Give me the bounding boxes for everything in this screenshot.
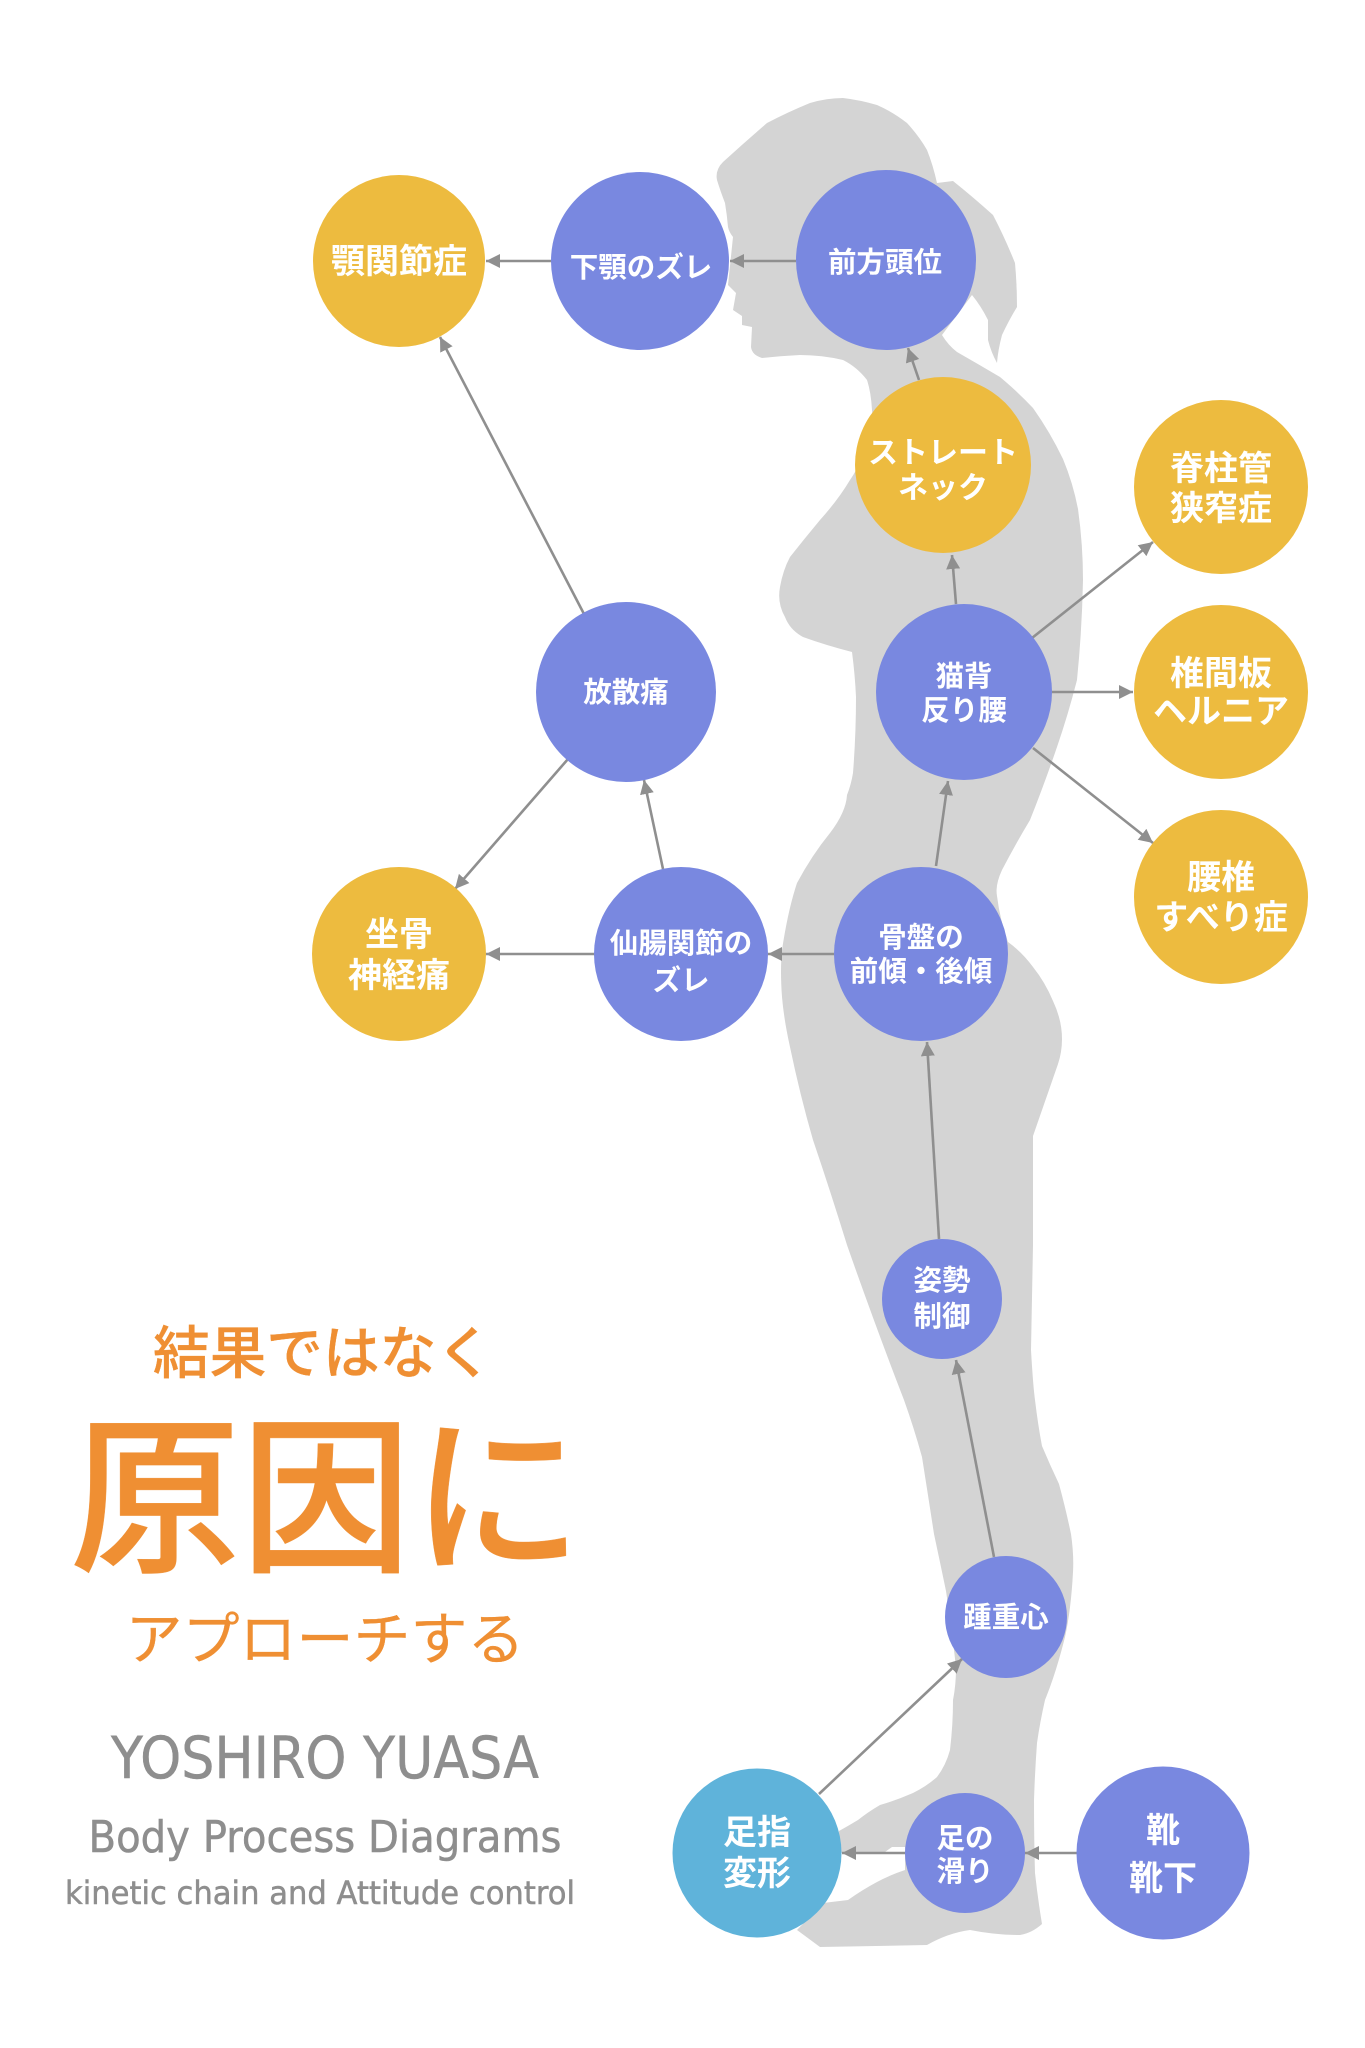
node: 仙腸関節のズレ: 仙腸関節の bbox=[610, 928, 752, 960]
heading: アプローチする: アプローチする bbox=[126, 1608, 524, 1672]
node: 顎関節症 bbox=[313, 175, 485, 347]
node: 前方頭位: 前方頭位 bbox=[828, 247, 942, 279]
node: 脊柱管狭窄症: 脊柱管 bbox=[1170, 450, 1272, 488]
node: 放散痛 bbox=[536, 602, 716, 782]
author name: YOSHIRO YUASA bbox=[110, 1724, 539, 1792]
node: 靴靴下: 靴 bbox=[1146, 1812, 1180, 1850]
node: ストレートネック: ストレート bbox=[868, 437, 1018, 470]
node: 顎関節症: 顎関節症 bbox=[331, 243, 467, 281]
arrows: causal links between nodes bbox=[440, 261, 1153, 1853]
node: 姿勢制御 bbox=[882, 1239, 1002, 1359]
node: 仙腸関節のズレ bbox=[594, 867, 768, 1041]
node: 坐骨神経痛: 坐骨 bbox=[365, 916, 433, 954]
node: 足指変形 bbox=[672, 1768, 842, 1938]
node: 脊柱管狭窄症 bbox=[1134, 400, 1308, 574]
node: ストレートネック: ネック bbox=[898, 472, 988, 505]
node: 坐骨神経痛: 神経痛 bbox=[348, 957, 450, 995]
node: 足の滑り: 滑り bbox=[936, 1856, 994, 1888]
node: 放散痛: 放散痛 bbox=[583, 677, 669, 709]
node: 猫背反り腰 bbox=[876, 604, 1052, 780]
node: 下顎のズレ bbox=[551, 172, 729, 350]
node: 足指変形: 足指 bbox=[723, 1814, 791, 1852]
node: 足指変形: 変形 bbox=[723, 1855, 791, 1893]
node: 靴靴下: 靴下 bbox=[1129, 1860, 1197, 1898]
node: 椎間板ヘルニア bbox=[1134, 605, 1308, 779]
node: 踵重心: 踵重心 bbox=[963, 1602, 1049, 1634]
node: 猫背反り腰: 反り腰 bbox=[921, 695, 1007, 727]
node: 腰椎すべり症: すべり症 bbox=[1154, 899, 1288, 937]
node: 骨盤の前傾・後傾 bbox=[834, 867, 1008, 1041]
heading: 原因に: 原因に bbox=[70, 1405, 582, 1596]
node: 脊柱管狭窄症: 狭窄症 bbox=[1170, 490, 1272, 528]
subtitle: Body Process Diagrams bbox=[88, 1812, 562, 1863]
node: ストレートネック bbox=[855, 377, 1031, 553]
node: 足の滑り: 足の bbox=[936, 1823, 994, 1855]
node: 腰椎すべり症: 腰椎 bbox=[1187, 859, 1255, 897]
node: 骨盤の前傾・後傾: 骨盤の bbox=[878, 922, 964, 954]
node: 足の滑り bbox=[905, 1793, 1025, 1913]
silhouette: standing woman in profile bbox=[717, 98, 1083, 1947]
node: 椎間板ヘルニア: ヘルニア bbox=[1153, 693, 1289, 731]
node: 猫背反り腰: 猫背 bbox=[935, 661, 993, 693]
node: 椎間板ヘルニア: 椎間板 bbox=[1170, 655, 1272, 693]
node: 坐骨神経痛 bbox=[312, 867, 486, 1041]
node: 姿勢制御: 制御 bbox=[913, 1301, 971, 1333]
node: 姿勢制御: 姿勢 bbox=[913, 1265, 971, 1297]
node: 腰椎すべり症 bbox=[1134, 810, 1308, 984]
tagline: kinetic chain and Attitude control bbox=[65, 1874, 575, 1912]
node: 前方頭位 bbox=[796, 170, 976, 350]
node: 下顎のズレ: 下顎のズレ bbox=[570, 251, 712, 284]
heading: 結果ではなく: 結果ではなく bbox=[153, 1323, 493, 1386]
node: 仙腸関節のズレ: ズレ bbox=[652, 964, 710, 997]
node: 踵重心 bbox=[945, 1556, 1067, 1678]
node: 骨盤の前傾・後傾: 前傾・後傾 bbox=[850, 956, 993, 988]
node: 靴靴下 bbox=[1076, 1766, 1250, 1940]
